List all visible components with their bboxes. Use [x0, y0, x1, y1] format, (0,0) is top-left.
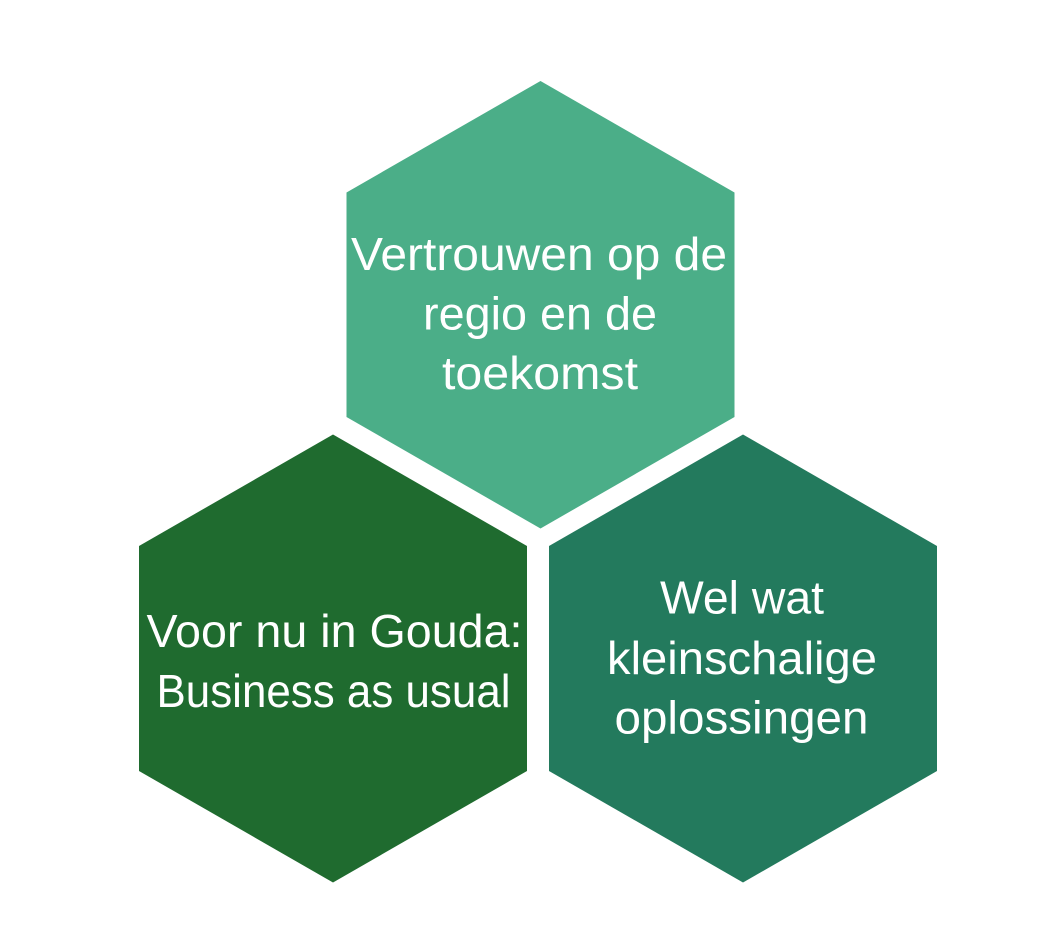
panel: bottom right hexagon	[549, 434, 937, 882]
text: Vertrouwen op de regio en de toekomst: regio en de	[423, 288, 657, 340]
text: Wel wat kleinschalige oplossingen	[607, 572, 877, 744]
text: Wel wat kleinschalige oplossingen: Wel wat	[660, 572, 824, 624]
text: Voor nu in Gouda: Business as usual	[146, 605, 522, 717]
text: Wel wat kleinschalige oplossingen: oplossingen	[614, 692, 868, 744]
text: Vertrouwen op de regio en de toekomst	[351, 228, 727, 399]
text: Vertrouwen op de regio en de toekomst: toekomst	[442, 347, 638, 399]
panel: bottom left hexagon	[139, 434, 527, 882]
text: Vertrouwen op de regio en de toekomst: Vertrouwen op de	[351, 228, 727, 280]
panel: top hexagon	[346, 81, 734, 528]
text: Voor nu in Gouda: Business as usual: Business as usual	[156, 665, 510, 717]
text: Wel wat kleinschalige oplossingen: kleinschalige	[607, 632, 877, 684]
text: Voor nu in Gouda: Business as usual: Voor nu in Gouda:	[146, 605, 522, 657]
